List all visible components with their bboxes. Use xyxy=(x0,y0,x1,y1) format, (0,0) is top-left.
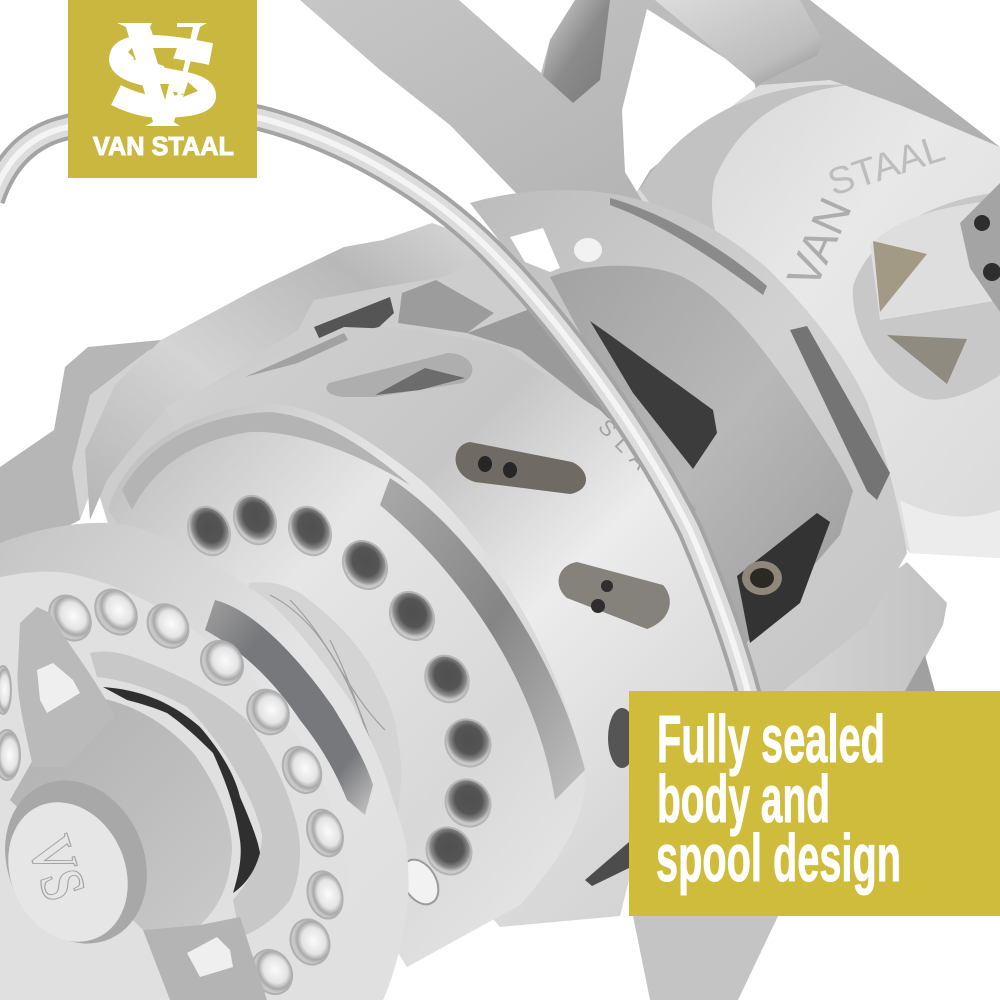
monogram V xyxy=(117,23,207,126)
logo background xyxy=(68,0,257,178)
lobe lower window xyxy=(187,937,233,977)
internal mechanism xyxy=(467,305,610,420)
brand name: VAN STAAL xyxy=(93,131,234,161)
shoulder window xyxy=(314,297,394,340)
hex socket xyxy=(750,568,774,588)
drum lower window xyxy=(608,708,636,768)
rotor white gaps xyxy=(510,228,560,272)
lobe upper window xyxy=(37,663,80,713)
slot 1 shadow xyxy=(375,368,465,395)
flange holes xyxy=(180,489,499,883)
callout heading: body and xyxy=(657,762,830,837)
bail wire body xyxy=(0,111,750,700)
knob lower bevel xyxy=(900,500,1000,558)
arm dark recess xyxy=(543,0,610,103)
knob triangle upper xyxy=(873,241,927,312)
cap engraved monogram: VS xyxy=(15,828,99,908)
bolt head xyxy=(960,183,1000,312)
flange bevel xyxy=(122,412,410,510)
hub dark gap xyxy=(103,687,260,893)
flange grey band xyxy=(380,478,585,800)
rotor top slot xyxy=(610,198,767,295)
hub cone xyxy=(10,695,232,930)
upper crossbar recess xyxy=(655,0,822,85)
bail wire highlight xyxy=(0,111,750,700)
cap face xyxy=(0,783,149,961)
knob centre opening xyxy=(853,192,1000,400)
monogram S xyxy=(116,46,211,107)
drum lower window 2 xyxy=(585,842,629,886)
bowl dark window xyxy=(590,321,717,469)
drag lobe upper xyxy=(17,607,115,767)
base stem xyxy=(633,916,778,1000)
rotor cup ring xyxy=(470,190,907,691)
bolt holes xyxy=(974,215,1000,281)
knob engraved STAAL: STAAL xyxy=(823,128,950,205)
spool back flange xyxy=(108,403,585,967)
spool drum xyxy=(165,327,750,927)
front rim holes xyxy=(0,581,349,1000)
body underlay xyxy=(85,240,600,530)
rear knob body xyxy=(637,80,1000,558)
drum slot 3 xyxy=(559,562,670,629)
slot 3 holes xyxy=(591,580,613,613)
bail wire xyxy=(0,111,750,700)
top frame arm xyxy=(300,0,1000,400)
brand logo panel xyxy=(68,0,257,178)
slot 2 holes xyxy=(478,456,517,478)
knob engraved VAN: VAN xyxy=(777,190,862,295)
shaft highlight xyxy=(870,200,1000,320)
drum engraved mark: SLAYER xyxy=(593,414,708,532)
fishing line strands xyxy=(270,595,398,850)
drag lobe lower xyxy=(143,917,267,1000)
monogram counters xyxy=(128,48,198,100)
callout heading xyxy=(656,702,901,896)
spool line well xyxy=(230,582,401,860)
rotor small opening xyxy=(574,238,602,262)
cap outer xyxy=(0,758,172,966)
foot inner cut xyxy=(905,655,935,691)
drum slot 2 xyxy=(456,442,586,494)
rim inner face xyxy=(0,572,347,1000)
shoulder gusset xyxy=(398,280,494,333)
arm cut-out small xyxy=(459,0,575,73)
knob triangle lower xyxy=(887,335,967,384)
drum slot 1 xyxy=(326,353,472,397)
front spool rim xyxy=(0,523,409,1000)
lower right foot xyxy=(740,562,947,691)
rotor right slot xyxy=(790,326,890,500)
rotor inner bowl xyxy=(550,266,853,647)
bowl lower shadow xyxy=(737,513,830,643)
drum small slit xyxy=(245,333,348,377)
arm cut-out large xyxy=(622,9,757,192)
hex screw xyxy=(742,561,782,595)
machined hub ring xyxy=(90,652,300,937)
joint inner ring xyxy=(72,345,165,520)
knob collar xyxy=(640,85,850,270)
callout background xyxy=(629,691,1000,916)
left body shoulder xyxy=(85,223,482,520)
flange bright hole xyxy=(394,853,446,911)
feature callout panel xyxy=(629,691,1000,916)
left joint xyxy=(0,340,161,560)
rim grey band xyxy=(205,600,373,815)
